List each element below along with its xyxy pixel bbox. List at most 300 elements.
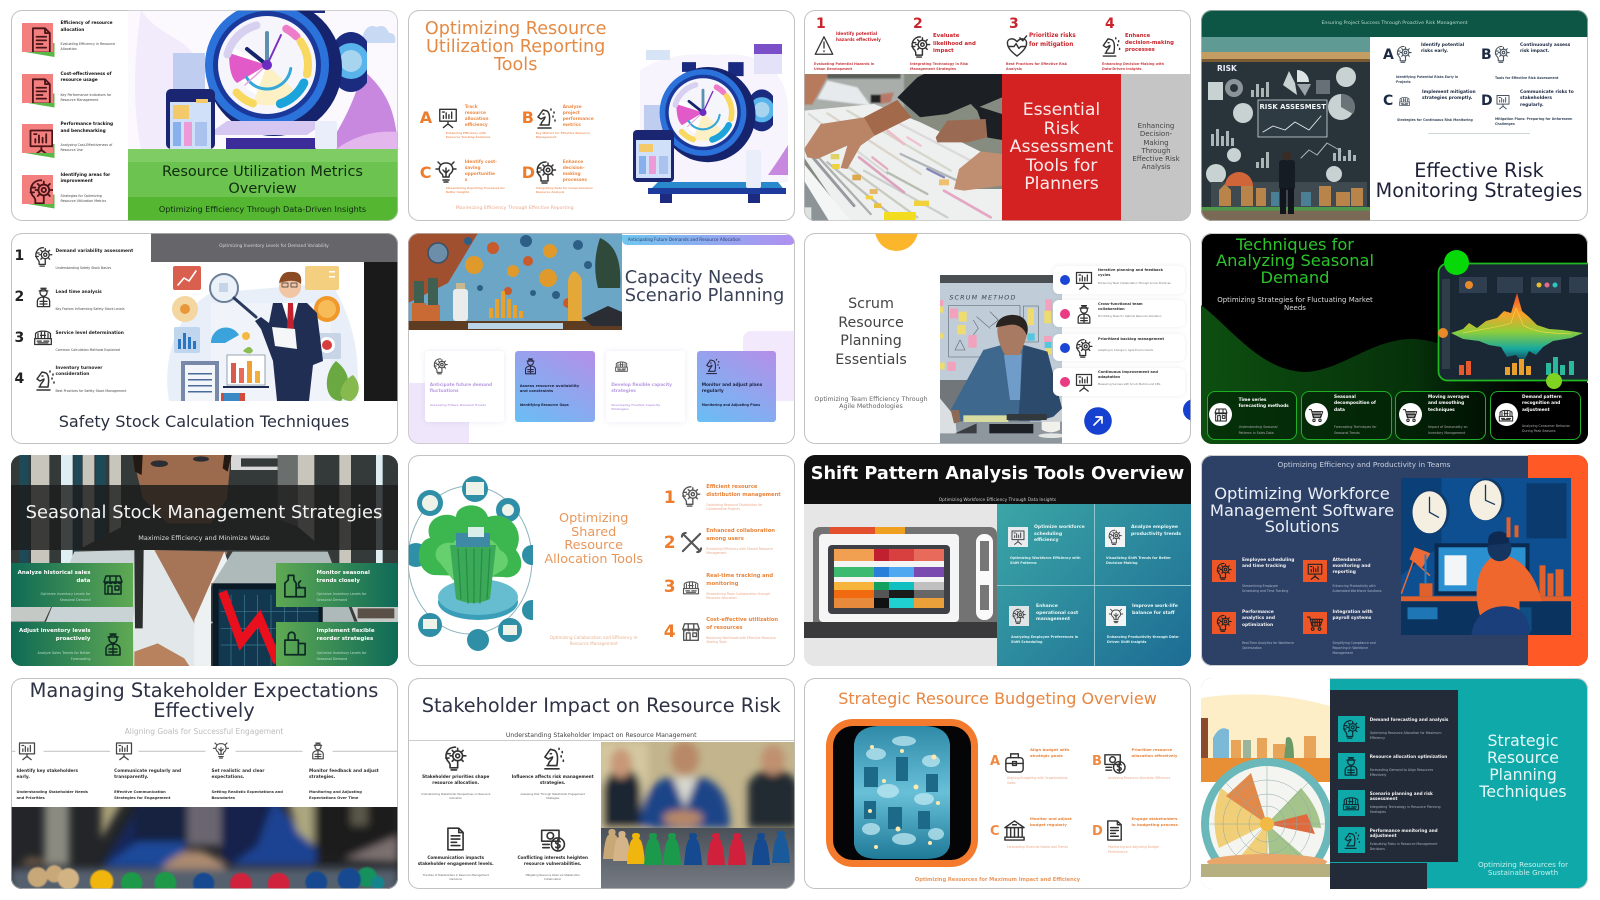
icon (439, 108, 457, 128)
cell title: management (1036, 617, 1070, 622)
box description: Optimize Inventory Levels for (316, 592, 367, 596)
letter: B (522, 108, 534, 127)
item 1 (664, 483, 792, 517)
step description (814, 62, 874, 71)
cell title (1036, 604, 1078, 624)
item title: optimization (1242, 623, 1273, 628)
card title: Monitor and adjust plans (702, 382, 762, 388)
item 4 (505, 824, 601, 886)
item description: Collaborative Projects (706, 507, 740, 511)
header band (804, 455, 1191, 504)
item description (446, 131, 490, 139)
letter: B (1092, 754, 1102, 768)
box description (10, 591, 90, 603)
item title (60, 72, 112, 83)
technique 4 (1490, 390, 1581, 440)
item title: resource (465, 111, 486, 116)
box description: Forecasting (71, 657, 90, 661)
technique description (1428, 424, 1468, 436)
title (1458, 732, 1588, 800)
item description (1370, 730, 1441, 741)
item description: Optimizing Resource Allocation for Maximum (1370, 730, 1441, 734)
card description: Strategies (611, 407, 629, 411)
box description: Seasonal Demand (316, 657, 347, 661)
title: Stakeholder Impact on Resource Risk (422, 694, 781, 716)
item title: assessment (1370, 796, 1398, 801)
cell description: Shift Scheduling (1011, 640, 1042, 644)
title (1370, 160, 1588, 202)
item title: metrics (563, 123, 581, 128)
panel: Techniques for Analyzing Seasonal Demand (1201, 232, 1588, 444)
panel: Optimizing Workforce Management Software Solutions (1201, 455, 1588, 666)
item description: Assessing Risk Through Stakeholder Engagement (521, 792, 585, 796)
card title (520, 382, 579, 393)
step description (1102, 62, 1164, 72)
subtitle: Sustainable Growth (1488, 868, 1558, 877)
item title: improvement (60, 179, 93, 184)
card title: strategies (611, 389, 636, 394)
step title: hazards effectively (836, 37, 881, 42)
item title (706, 572, 773, 588)
illustration: cloud with resources (408, 470, 533, 655)
subtitle: Agile Methodologies (839, 403, 903, 410)
card title: fluctuations (430, 389, 459, 394)
icon tile (1338, 716, 1364, 742)
item title: Performance monitoring and (1370, 828, 1438, 832)
icon tile (1105, 527, 1125, 547)
cell description (1106, 556, 1171, 566)
icon (1397, 95, 1412, 107)
subtitle (804, 396, 938, 411)
item description (1495, 117, 1572, 127)
cell title: Improve work-life (1132, 604, 1178, 609)
icon (98, 632, 126, 656)
item title (408, 774, 504, 787)
item description (1370, 842, 1437, 852)
item title: Continuously assess (1520, 43, 1570, 48)
subtitle (1201, 296, 1389, 313)
letter: C (1383, 93, 1393, 109)
item description (505, 792, 601, 802)
subtitle: Enhancing (1138, 122, 1174, 130)
item title: project (563, 111, 580, 116)
item description: Identifying Potential Risks Early in (1396, 75, 1458, 79)
item title: adaptation (1098, 375, 1120, 379)
item description (536, 186, 593, 194)
step 2 (910, 16, 976, 71)
technique description (1522, 424, 1570, 434)
icon: knight (1098, 35, 1122, 58)
item description: Forecasting Financial Needs and Trends (1007, 844, 1068, 848)
step title: Prioritize risks (1029, 33, 1076, 39)
item description (60, 92, 112, 102)
item title: resource allocation. (432, 780, 479, 785)
item description: Sharing Tools (706, 640, 727, 644)
item title: risks early. (1421, 49, 1448, 54)
item title: Demand forecasting and analysis (1370, 716, 1448, 722)
technique description: Analyzing Consumer Behavior (1522, 424, 1570, 428)
item B (522, 104, 594, 139)
card: assess resources (515, 350, 595, 422)
item title: Lead time analysis (56, 290, 102, 294)
technique title (1428, 395, 1469, 414)
gray subtitle panel (1121, 74, 1191, 221)
subtitle: Resource Management (570, 641, 618, 646)
illustration: scheduling tablet (804, 504, 997, 666)
lime circle (1546, 373, 1562, 389)
technique description: Patterns in Sales Data (1239, 430, 1274, 434)
arrow button (1084, 407, 1112, 435)
item title: s (465, 178, 467, 183)
cell title (1034, 525, 1085, 545)
title: Overview (228, 181, 297, 197)
item title: Communicate risks to (1520, 90, 1574, 95)
item description: Management (1332, 651, 1353, 655)
item 4 (1338, 826, 1456, 856)
number: 4 (664, 622, 676, 642)
title: Resource (838, 315, 904, 331)
cell description: Optimizing Workforce Efficiency with (1010, 556, 1080, 560)
title: Optimizing Resource (425, 19, 606, 39)
icon tile (1303, 560, 1326, 582)
panel: Strategic Resource Planning Techniques (1201, 678, 1588, 888)
title (1002, 101, 1121, 194)
technique title: Demand pattern (1522, 395, 1562, 400)
icon badge (1209, 403, 1232, 426)
step title (1125, 33, 1174, 55)
decorative yellow circle (875, 208, 918, 250)
item: efficiency of resource allocation (22, 20, 115, 57)
item title (1520, 90, 1574, 109)
title: Resource (1487, 748, 1559, 766)
step description (16, 788, 88, 800)
title: Effectively (153, 698, 255, 722)
box title: Monitor seasonal (316, 570, 370, 576)
item title: reporting (1332, 570, 1356, 575)
card: anticipate demand (425, 350, 504, 422)
item description: Mitigating Resource Risks via Stakeholder (526, 874, 580, 877)
card title: Anticipate future demand (430, 382, 492, 388)
item description: Real-Time Analytics for Workforce (1242, 641, 1294, 645)
item title: Communication impacts (427, 855, 484, 860)
title (162, 164, 363, 197)
step 3 (1006, 16, 1076, 71)
subtitle (1121, 122, 1191, 172)
title: Managing Stakeholder Expectations (30, 678, 378, 702)
item title: Identifying areas for (60, 172, 110, 178)
footer text: Maximizing Efficiency Through Effective Reporting (456, 206, 574, 211)
panel: Strategic Resource Budgeting Overview (804, 678, 1191, 888)
box description (316, 591, 367, 603)
list item 4 (1053, 368, 1185, 396)
item description (446, 186, 505, 194)
item description (1332, 641, 1376, 656)
item description: Integrating Data for Comprehensive (536, 186, 593, 190)
cell title: productivity trends (1131, 532, 1181, 537)
step title: impact (933, 48, 954, 54)
panel: Shift Pattern Analysis Tools Overview (804, 455, 1191, 666)
item title: Continuous improvement and (1098, 370, 1158, 374)
item title (1421, 43, 1464, 56)
card description: Developing Flexible Capacity (611, 402, 660, 406)
cell description: Shift Patterns (1010, 561, 1037, 565)
item description: Projects (1396, 80, 1411, 84)
divider (1428, 132, 1530, 134)
item title (1520, 43, 1570, 56)
cell title: balance for staff (1132, 611, 1175, 616)
illustration: businessman with charts (166, 262, 364, 400)
letter: D (522, 163, 535, 182)
item title (1242, 610, 1275, 629)
icon (1395, 45, 1413, 63)
icon (22, 124, 52, 153)
item title: Performance (1242, 610, 1274, 615)
item title: Inventory turnover (56, 366, 102, 370)
background wave (1201, 232, 1588, 444)
item description: Allocation (60, 47, 77, 51)
step description (212, 788, 283, 800)
icon (16, 740, 36, 760)
step description (309, 788, 362, 800)
list item 2 (1053, 300, 1185, 326)
card title: regularly (702, 389, 724, 394)
item title: strategies. (540, 780, 565, 785)
title: Seasonal Stock Management Strategies (26, 502, 382, 523)
item title (1242, 558, 1294, 570)
item title: Analyze (563, 105, 582, 110)
item title (60, 20, 113, 32)
subtitle: Maximize Efficiency and Minimize Waste (138, 534, 270, 542)
step title: Enhance (1125, 33, 1150, 39)
item title: analytics and (1242, 616, 1275, 621)
subtitle (1458, 861, 1588, 878)
subtitle: Decision- (1140, 130, 1172, 138)
icon (1074, 372, 1094, 392)
illustration: stopwatch (633, 44, 788, 203)
icon (432, 356, 449, 374)
item title: strategic goals (1030, 752, 1063, 758)
item title: resource usage (60, 78, 98, 83)
card description: Identifying Resource Gaps (520, 402, 569, 406)
horizontal divider (997, 584, 1191, 586)
box description (316, 650, 367, 662)
item description: Key Performance Indicators for (60, 92, 111, 96)
title: Resource (564, 538, 623, 553)
number: 1 (14, 248, 24, 264)
step 1 (16, 740, 108, 802)
icon (114, 740, 134, 760)
title: Techniques (1479, 782, 1567, 800)
item title (505, 774, 601, 787)
dark side bar (364, 262, 398, 400)
item description: Enhancing Efficiency with Shared Resource (706, 547, 773, 551)
item description: Key Factors Influencing Safety Stock Levels (56, 306, 125, 310)
item description: Adapting to Change in Agile Environments (1098, 348, 1153, 352)
title: Strategic Resource Budgeting Overview (838, 688, 1157, 708)
item description: Efficiency (1370, 736, 1385, 740)
chalkboard heading: RISK ASSESMEST (1260, 103, 1326, 111)
photo: man at scrum board: SCRUM METHOD (949, 294, 1015, 301)
dark panel foot (1330, 862, 1427, 888)
step title (212, 768, 265, 782)
title (533, 512, 655, 566)
item description (706, 503, 762, 512)
icon (280, 630, 308, 657)
item title: making (563, 172, 581, 177)
item title: Cross-functional team (1098, 302, 1143, 306)
item title (562, 160, 587, 183)
item description: Common Calculation Methods Explained (56, 348, 120, 352)
item title (1030, 816, 1072, 828)
title: Capacity Needs (625, 266, 764, 288)
step description: Management Strategies (910, 67, 956, 71)
step title: transparently. (114, 775, 148, 780)
item title: of resources (706, 625, 742, 631)
item title: Enhance (563, 160, 583, 165)
item title: Track (465, 105, 478, 110)
icon tile (1212, 612, 1236, 634)
step description (910, 62, 968, 71)
number: 3 (1009, 16, 1019, 32)
item title: efficiency (465, 123, 488, 128)
icon tile (1106, 606, 1126, 626)
item title: Enhanced collaboration (706, 528, 775, 534)
decorative blob: bottom left (408, 382, 469, 444)
icon tile (1338, 752, 1364, 778)
item title (1098, 302, 1143, 312)
item 4 (1303, 612, 1393, 657)
vertical divider (1094, 504, 1095, 666)
item description: Strategies for Continuous Risk Monitoring (1397, 118, 1473, 122)
item description: Goals (1007, 781, 1016, 785)
letter: D (1481, 93, 1493, 109)
item title: and benchmarking (60, 128, 106, 134)
step description (114, 788, 170, 800)
cell 1 (1008, 525, 1092, 570)
cell title: Enhance (1036, 604, 1058, 609)
icon (536, 161, 556, 184)
icon tile (28, 94, 54, 108)
item title (464, 104, 488, 128)
card description (611, 402, 660, 412)
card title (611, 382, 672, 395)
item description: Automated Workforce Solutions (1332, 589, 1381, 593)
item B (1092, 746, 1186, 794)
title (1201, 236, 1389, 287)
cell description (1107, 635, 1179, 645)
technique description: Forecasting Techniques for (1334, 424, 1377, 428)
box title: Implement flexible (316, 628, 375, 634)
box title: Analyze historical sales (18, 570, 90, 576)
green circle (1444, 250, 1469, 274)
card title (702, 382, 762, 395)
item 1 (1212, 560, 1300, 596)
box title (10, 569, 90, 585)
item title: allocation (60, 28, 84, 32)
cell 2 (1105, 525, 1189, 570)
item title: regularly. (1520, 103, 1544, 108)
box title: reorder strategies (316, 636, 373, 642)
icon: gear bulb (911, 36, 930, 58)
item description: Understanding Safety Stock Basics (56, 266, 111, 270)
item D (1092, 816, 1186, 864)
item description: Strategies for Optimizing (60, 194, 102, 198)
panel: Effective Risk Monitoring Strategies (1201, 10, 1588, 221)
cell 4 (1106, 604, 1190, 649)
item D (522, 160, 593, 194)
item title: Identify cost- (465, 160, 497, 165)
cell description: Enhancing Productivity through Data- (1107, 635, 1179, 639)
item description: Decisions (1370, 847, 1385, 851)
bullet (1060, 308, 1070, 318)
item description: Evaluating Efficiency in Resource (60, 42, 115, 46)
subtitle: Optimizing Strategies for Fluctuating Market (1217, 296, 1373, 304)
title: Tools (494, 55, 537, 75)
timeline segments (10, 750, 398, 752)
item description: Enhancing Team Collaboration Through Scrum Practices (1098, 282, 1171, 284)
item title: Cost-effective utilization (706, 617, 778, 623)
panel: Resource Utilization Metrics Overview (10, 10, 398, 221)
photo: man with falling chart tablet (10, 455, 398, 666)
technique title: forecasting methods (1239, 404, 1289, 409)
dark panel (1330, 690, 1458, 862)
icon badge (1494, 403, 1518, 426)
title: Risk (1044, 118, 1079, 138)
item title: allocation (465, 117, 488, 122)
item description: Performance (1108, 850, 1128, 854)
step description: Understanding Stakeholder Needs (16, 790, 88, 794)
step title (933, 33, 976, 54)
icon (32, 326, 54, 346)
title: Analyzing Seasonal (1216, 251, 1374, 270)
subtitle: Making (1143, 139, 1169, 147)
item title: in budgeting process (1132, 822, 1178, 826)
technique title: Seasonal (1334, 395, 1356, 400)
number: 3 (664, 577, 676, 597)
step title: Set realistic and clear (212, 768, 265, 774)
item title: Stakeholder priorities shape (422, 774, 489, 778)
item description (60, 42, 115, 51)
image: glowing glass bottles (826, 718, 978, 866)
item description: Resource Management (60, 98, 98, 102)
step description: and Priorities (16, 796, 45, 800)
item description (408, 874, 504, 883)
panel: Optimizing Shared Resource Allocation Tools (408, 455, 795, 666)
technique description (1334, 424, 1377, 436)
icon tile (28, 194, 54, 208)
title band (128, 149, 398, 221)
panel: Optimizing Resource Utilization Reporting Tools (408, 10, 795, 221)
subtitle: Through (1141, 147, 1171, 155)
item description: Better Insights (446, 190, 469, 194)
number: 2 (664, 533, 676, 553)
title: Utilization Reporting (426, 37, 605, 57)
cell description: Decision-Making (1106, 561, 1138, 565)
item description (1242, 584, 1288, 594)
item title: saving (465, 166, 481, 171)
header band (622, 234, 795, 244)
icon (1103, 750, 1126, 774)
subtitle: Optimizing Workforce Efficiency Through Data Insights (939, 498, 1056, 502)
item description: Integrating Technology in Resource Planning (1370, 804, 1440, 808)
step title: decision-making (1125, 40, 1174, 46)
step description: Analysis (1006, 67, 1022, 71)
title: Scenario Planning (625, 285, 784, 306)
item 2 (664, 527, 792, 561)
technique title: Moving averages (1428, 395, 1469, 400)
item: identifying areas (22, 172, 110, 208)
step title: strategies. (309, 775, 335, 780)
